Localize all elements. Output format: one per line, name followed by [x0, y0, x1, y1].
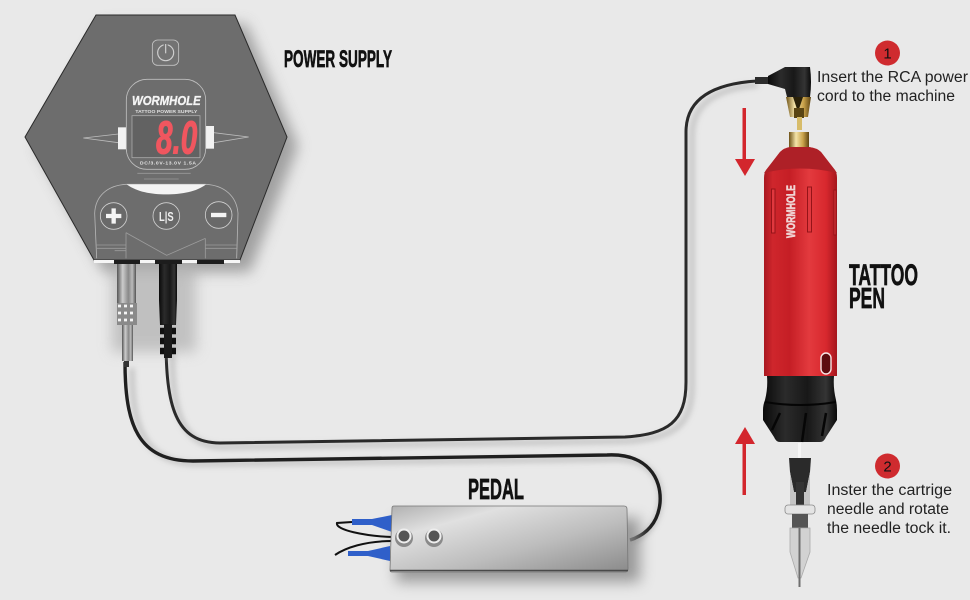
panel artwork: [83, 40, 249, 258]
button panel: [95, 184, 238, 258]
step 2 badge: 2: [883, 458, 892, 476]
subtitle: TATTOO POWER SUPPLY: [135, 109, 198, 115]
gold tip: [789, 132, 809, 148]
label: pedal: PEDAL: [468, 474, 524, 506]
label: tattoo pen: TATTOO: [849, 259, 918, 292]
screw 1: [395, 529, 413, 547]
arrow: down: [735, 108, 755, 176]
RCA connector: [755, 67, 811, 130]
plus button: [100, 203, 127, 229]
power supply: [25, 15, 298, 352]
hexagon body: [25, 15, 287, 260]
pedal: [335, 506, 640, 582]
step 2 badge: [875, 454, 900, 478]
jack plug: black: [159, 264, 177, 358]
step 1 badge: 1: [883, 46, 892, 62]
label: power supply: POWER SUPPLY: [284, 46, 392, 73]
minus button: [205, 202, 232, 228]
blue terminals: [352, 515, 392, 532]
display digits: 8.0: [156, 111, 197, 163]
slots: [772, 187, 836, 235]
step 2 text: Inster the cartrige: [827, 482, 952, 499]
label: tattoo pen: [849, 259, 918, 315]
display window: [132, 116, 200, 158]
step 2 text: needle and rotate: [827, 501, 949, 518]
bottom sockets: [114, 260, 224, 264]
step 2 text: the needle tock it.: [827, 520, 951, 537]
black grip: [763, 376, 837, 442]
display surround: [126, 79, 206, 169]
tattoo pen: [763, 132, 837, 442]
bottom edge highlight: [94, 260, 240, 263]
step 2 text: [827, 482, 952, 537]
L/S button: [153, 203, 180, 229]
rating text: DC/3.0V-13.0V 1.5A: [140, 161, 196, 167]
pedal wires: [335, 522, 392, 555]
brand text: WORMHOLE: [132, 94, 201, 108]
side brackets: [83, 126, 249, 149]
brand on pen: WORMHOLE: [784, 185, 798, 238]
jack plug: metal: [117, 264, 137, 367]
needle cartridge: [785, 443, 815, 587]
step 1 text: Insert the RCA power: [817, 69, 968, 86]
red body: [764, 147, 837, 376]
L/S button: L|S: [159, 209, 174, 224]
oval port: [821, 353, 831, 374]
screw 2: [425, 529, 443, 547]
step 1 text: [817, 69, 968, 105]
arrow: up: [735, 427, 755, 495]
power button: [152, 40, 179, 65]
white crescent: [127, 184, 206, 194]
cable shadows: [132, 85, 758, 541]
pedal plate: [390, 506, 628, 572]
cable: power supply to pedal: [125, 362, 660, 540]
step 1 text: cord to the machine: [817, 88, 955, 105]
label: tattoo pen: PEN: [849, 283, 885, 315]
step 1 badge: [875, 40, 900, 66]
cable: power supply to tattoo pen: [166, 81, 757, 443]
hexagon shadow: [36, 24, 298, 272]
plug shadow: [112, 262, 196, 352]
pedal shadow: [396, 518, 640, 582]
